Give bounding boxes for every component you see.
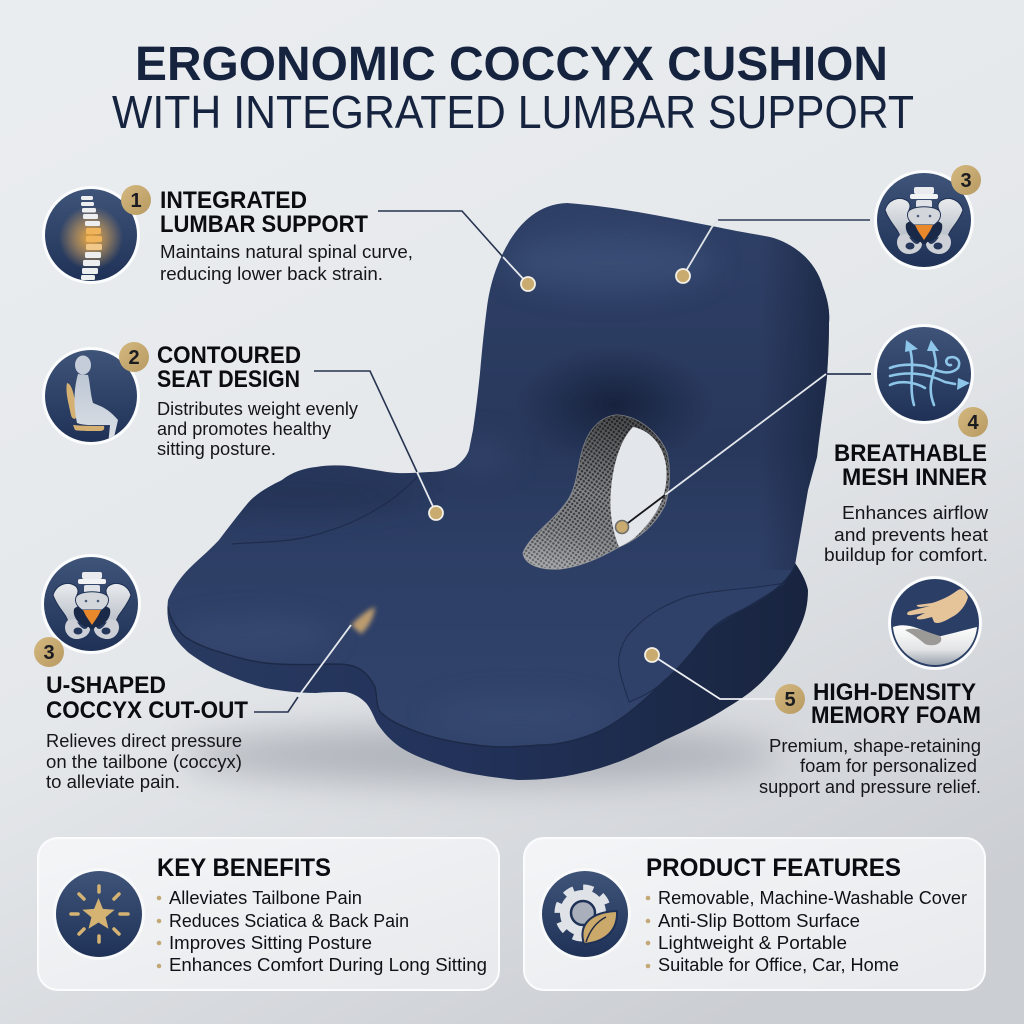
text block: integrated lumbar support: reducing lower back strain. bbox=[160, 264, 383, 284]
text block: integrated lumbar support bbox=[160, 187, 413, 284]
lip highlight bbox=[168, 565, 795, 747]
badge 3 right bbox=[951, 165, 981, 195]
leader line: contoured seat bbox=[314, 371, 443, 520]
features list: Anti-Slip Bottom Surface bbox=[658, 910, 860, 931]
badge 3 right: 3 bbox=[960, 170, 972, 192]
badge 1 bbox=[121, 185, 151, 215]
icon: spine bbox=[42, 186, 140, 284]
text block: contoured seat design: SEAT DESIGN bbox=[157, 366, 300, 393]
icon: pelvis right bbox=[874, 170, 974, 270]
leader line: coccyx bbox=[254, 625, 351, 712]
badge 2: 2 bbox=[128, 347, 140, 369]
text block: breathable mesh inner: buildup for comfort. bbox=[824, 545, 988, 565]
badge 5 bbox=[775, 684, 805, 714]
badge 4: 4 bbox=[967, 412, 979, 434]
leader line: lumbar support bbox=[378, 211, 535, 291]
text block: memory foam: Premium, shape-retaining bbox=[769, 736, 981, 756]
icon: star bbox=[53, 868, 145, 960]
benefits list: Improves Sitting Posture bbox=[169, 932, 372, 953]
benefits list: Alleviates Tailbone Pain bbox=[169, 887, 362, 908]
text block: coccyx cut-out bbox=[46, 672, 248, 792]
text block: memory foam: MEMORY FOAM bbox=[811, 702, 981, 729]
text block: coccyx cut-out: on the tailbone (coccyx) bbox=[46, 752, 242, 772]
text block: breathable mesh inner: MESH INNER bbox=[842, 464, 987, 491]
features list bbox=[646, 887, 967, 975]
text block: memory foam: support and pressure relief. bbox=[759, 777, 981, 797]
text block: integrated lumbar support: INTEGRATED bbox=[160, 187, 307, 214]
features heading: PRODUCT FEATURES bbox=[646, 854, 901, 882]
text block: integrated lumbar support: Maintains natural spinal curve, bbox=[160, 242, 413, 262]
text block: contoured seat design: and promotes healthy bbox=[157, 419, 331, 439]
icon: airflow bbox=[874, 324, 974, 424]
badge 3 left bbox=[34, 637, 64, 667]
leader line: breathable mesh bbox=[616, 374, 871, 534]
text block: contoured seat design bbox=[157, 342, 358, 459]
badge 5: 5 bbox=[784, 689, 796, 711]
coccyx glow bbox=[351, 607, 375, 634]
badge 1: 1 bbox=[130, 190, 142, 212]
text block: breathable mesh inner: BREATHABLE bbox=[834, 440, 987, 467]
features list: Suitable for Office, Car, Home bbox=[658, 954, 899, 975]
seat seam bbox=[232, 477, 417, 544]
leader line: memory foam bbox=[645, 648, 775, 699]
icon: gear and leaf bbox=[539, 868, 631, 960]
mesh cut-out bbox=[523, 415, 669, 569]
text block: coccyx cut-out: Relieves direct pressure bbox=[46, 731, 242, 751]
text block: breathable mesh inner: Enhances airflow bbox=[842, 503, 989, 523]
badge 3 left: 3 bbox=[43, 642, 55, 664]
icon: seated figure bbox=[42, 347, 140, 446]
text block: memory foam: foam for personalized bbox=[800, 756, 977, 776]
text block: breathable mesh inner bbox=[824, 440, 989, 565]
text block: memory foam bbox=[759, 679, 981, 797]
title: ERGONOMIC COCCYX CUSHION bbox=[135, 38, 888, 91]
text block: coccyx cut-out: U-SHAPED bbox=[46, 672, 166, 699]
text block: contoured seat design: CONTOURED bbox=[157, 342, 301, 369]
features list: Lightweight & Portable bbox=[658, 932, 847, 953]
badge 2 bbox=[119, 342, 149, 372]
text block: coccyx cut-out: to alleviate pain. bbox=[46, 772, 180, 792]
features list: Removable, Machine-Washable Cover bbox=[658, 887, 967, 908]
text block: memory foam: HIGH-DENSITY bbox=[813, 679, 976, 706]
benefits list bbox=[157, 887, 487, 975]
text block: contoured seat design: Distributes weight evenly bbox=[157, 399, 358, 419]
icon: pelvis left bbox=[41, 554, 141, 654]
benefits list: Reduces Sciatica & Back Pain bbox=[169, 910, 409, 931]
text block: contoured seat design: sitting posture. bbox=[157, 439, 276, 459]
cushion illustration bbox=[167, 203, 832, 783]
badge 4 bbox=[958, 407, 988, 437]
title bbox=[112, 38, 914, 138]
panel: product features bbox=[524, 838, 985, 990]
side panel bbox=[619, 583, 785, 702]
benefits heading: KEY BENEFITS bbox=[157, 854, 331, 882]
text block: breathable mesh inner: and prevents heat bbox=[834, 525, 988, 545]
text block: integrated lumbar support: LUMBAR SUPPORT bbox=[160, 211, 368, 238]
icon: hand on memory foam bbox=[888, 576, 982, 670]
text block: coccyx cut-out: COCCYX CUT-OUT bbox=[46, 697, 248, 724]
title: WITH INTEGRATED LUMBAR SUPPORT bbox=[112, 86, 914, 138]
panel: key benefits bbox=[38, 838, 499, 990]
leader line: pelvis icon bbox=[676, 220, 870, 283]
benefits list: Enhances Comfort During Long Sitting bbox=[169, 954, 487, 975]
